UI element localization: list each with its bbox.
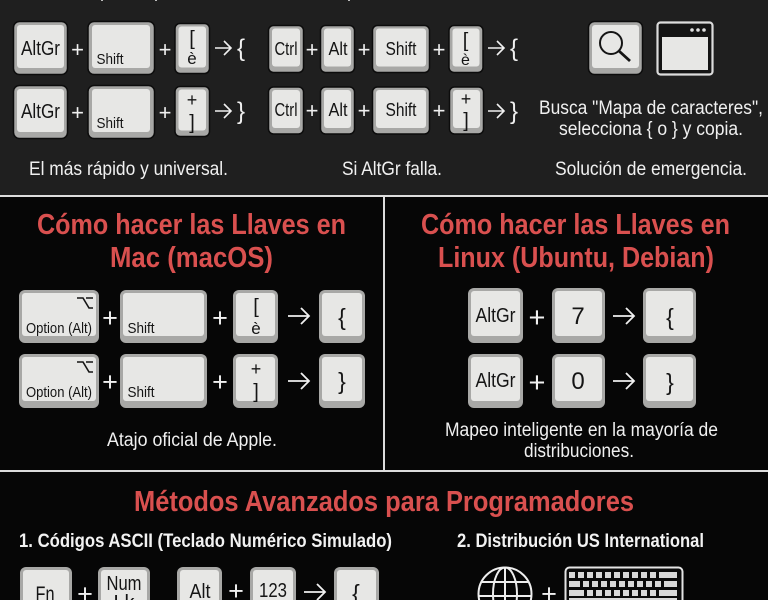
key: Shift close: Shift xyxy=(386,100,416,120)
key: bracket close: ] xyxy=(189,112,195,134)
plus: + xyxy=(159,100,171,125)
plus: + xyxy=(102,367,118,397)
cut-off heading fragments xyxy=(101,0,350,1)
key: Shift open: Shift xyxy=(128,320,155,337)
key: bracket open: [ xyxy=(189,28,195,50)
caption: Mapeo inteligente en la mayoría de xyxy=(445,420,718,441)
key: Shift close xyxy=(88,86,154,138)
heading: Linux (Ubuntu, Debian) xyxy=(438,242,714,274)
key: Shift open xyxy=(120,290,207,343)
key: Ctrl open xyxy=(268,26,304,72)
plus: + xyxy=(433,37,445,62)
key: Alt open xyxy=(320,26,354,72)
key: bracket close: ] xyxy=(253,381,259,403)
key: AltGr close xyxy=(14,86,68,138)
key: bracket open xyxy=(233,290,278,343)
key: bracket close: + xyxy=(251,359,261,379)
key: Shift open: Shift xyxy=(96,51,124,68)
arrow xyxy=(288,308,309,324)
arrow and open brace xyxy=(488,35,518,62)
key: Option close xyxy=(19,354,99,408)
key: AltGr close xyxy=(468,354,523,408)
key: Num Lk xyxy=(98,567,150,600)
key: bracket open: [ xyxy=(463,30,469,52)
key: Alt close xyxy=(320,87,354,134)
icon: search key xyxy=(588,22,642,74)
plus: + xyxy=(358,37,370,62)
key: open brace xyxy=(319,290,365,343)
key: Shift close xyxy=(372,87,430,134)
key: close brace: } xyxy=(338,368,346,394)
key: Shift close: Shift xyxy=(128,384,155,401)
caption: Si AltGr falla. xyxy=(342,159,442,180)
plus: + xyxy=(212,303,228,333)
plus: + xyxy=(433,98,445,123)
key: Ctrl open: Ctrl xyxy=(274,39,298,59)
key: close brace xyxy=(643,354,696,408)
key: zero xyxy=(552,354,605,408)
arrow and open brace: { xyxy=(510,35,518,62)
key: bracket open: è xyxy=(187,49,197,68)
key: Ctrl close xyxy=(268,87,304,134)
arrow xyxy=(613,373,634,389)
key: bracket open xyxy=(449,26,483,72)
arrow and close brace xyxy=(215,98,245,125)
key: Ctrl close: Ctrl xyxy=(274,100,298,120)
key: open brace xyxy=(334,567,379,600)
key: Shift open xyxy=(372,26,430,72)
heading: Cómo hacer las Llaves en xyxy=(421,209,730,241)
method 2: Ctrl Alt shortcut xyxy=(268,26,518,180)
key: Option open xyxy=(19,290,99,343)
key: Shift open: Shift xyxy=(386,39,416,59)
plus: + xyxy=(358,98,370,123)
key: bracket close xyxy=(175,86,210,136)
key: close brace: } xyxy=(666,369,674,395)
panel: advanced methods xyxy=(0,472,768,600)
plus: + xyxy=(71,100,84,125)
key: AltGr close: AltGr xyxy=(21,101,60,123)
caption: distribuciones. xyxy=(524,441,634,462)
key: close brace xyxy=(319,354,365,408)
key: bracket close xyxy=(450,87,484,134)
key: bracket open xyxy=(175,24,210,74)
method 3: character map xyxy=(539,22,763,180)
key: bracket open: [ xyxy=(253,296,259,318)
plus: + xyxy=(102,303,118,333)
key: Fn xyxy=(20,567,72,600)
key: Shift close: Shift xyxy=(96,115,124,132)
heading xyxy=(421,209,730,274)
key: Shift open xyxy=(88,22,154,74)
icon: application window xyxy=(658,22,712,74)
panel: Linux xyxy=(385,197,768,470)
subheading: US International: 2. Distribución US International xyxy=(457,531,704,552)
key: AltGr open: AltGr xyxy=(476,305,516,327)
key: 123 xyxy=(250,567,296,600)
arrow xyxy=(304,584,325,600)
caption: Solución de emergencia. xyxy=(555,159,747,180)
key: bracket close xyxy=(233,354,278,408)
key: Option close: Option (Alt) xyxy=(26,384,92,401)
key: AltGr close: AltGr xyxy=(476,370,516,392)
panel: Windows xyxy=(0,0,768,195)
key: bracket open: è xyxy=(251,319,261,338)
key: Option open: Option (Alt) xyxy=(26,320,92,337)
key: open brace: { xyxy=(666,304,674,330)
heading: Cómo hacer las Llaves en xyxy=(37,209,346,241)
arrow and open brace xyxy=(215,35,245,62)
instructions xyxy=(539,98,763,140)
arrow xyxy=(613,308,634,324)
arrow and close brace xyxy=(488,98,518,125)
instructions: selecciona { o } y copia. xyxy=(559,119,743,140)
key: Alt open: Alt xyxy=(328,39,348,59)
caption xyxy=(445,420,718,462)
plus: + xyxy=(306,37,318,62)
key: AltGr open xyxy=(14,22,68,74)
key: open brace xyxy=(643,288,696,343)
heading: Mac (macOS) xyxy=(110,242,273,274)
key: Alt close: Alt xyxy=(328,100,348,120)
key: bracket close: + xyxy=(187,90,197,110)
icon: keyboard xyxy=(566,568,682,600)
key: Shift close xyxy=(120,354,207,408)
plus: + xyxy=(306,98,318,123)
heading: Métodos Avanzados para Programadores xyxy=(134,486,634,518)
key: seven xyxy=(552,288,605,343)
icon: globe xyxy=(478,568,532,600)
key: zero: 0 xyxy=(571,368,585,395)
arrow and close brace: } xyxy=(237,98,245,125)
arrow and open brace: { xyxy=(237,35,245,62)
key: open brace: { xyxy=(338,304,346,330)
arrow and close brace: } xyxy=(510,98,518,125)
key: seven: 7 xyxy=(571,303,585,330)
key: bracket close: ] xyxy=(463,110,469,132)
subheading: ASCII codes: 1. Códigos ASCII (Teclado Numérico Simulado) xyxy=(19,531,392,552)
panel: Mac xyxy=(0,197,383,470)
arrow xyxy=(288,373,309,389)
plus: + xyxy=(159,37,171,62)
caption: Atajo oficial de Apple. xyxy=(107,430,277,451)
method 1: AltGr shortcut xyxy=(14,22,245,180)
plus: + xyxy=(529,367,545,399)
plus: + xyxy=(212,367,228,397)
key: AltGr open xyxy=(468,288,523,343)
heading xyxy=(37,209,346,274)
plus: + xyxy=(529,302,545,334)
key: Alt xyxy=(177,567,222,600)
key: AltGr open: AltGr xyxy=(21,38,60,60)
key: Num Lk: Num xyxy=(106,573,142,595)
key: bracket close: + xyxy=(461,89,471,109)
caption: El más rápido y universal. xyxy=(29,159,228,180)
plus: + xyxy=(71,37,84,62)
key: bracket open: è xyxy=(461,52,470,69)
